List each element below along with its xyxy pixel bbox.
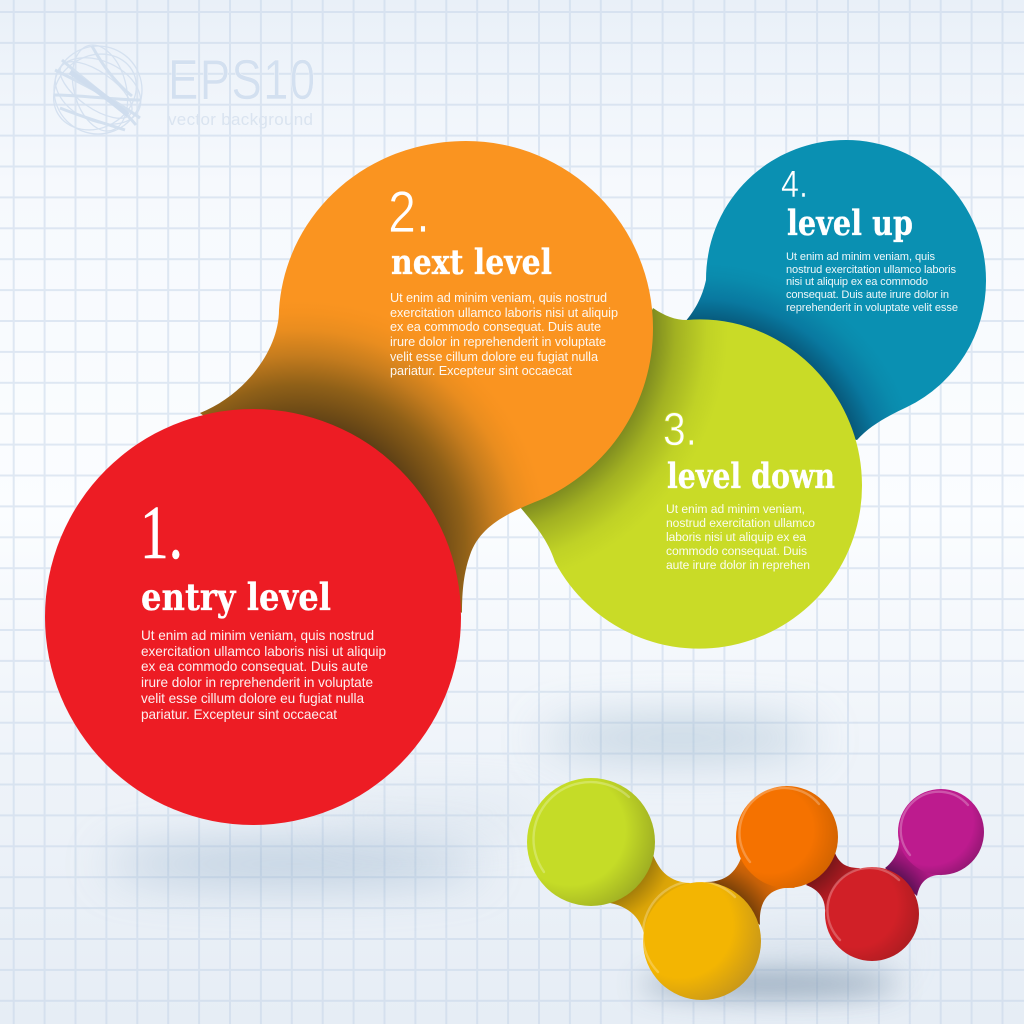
body text: Ut enim ad minim veniam, quis	[786, 251, 935, 263]
heading: next level: next level	[391, 242, 552, 283]
body text: Ut enim ad minim veniam,	[666, 502, 805, 516]
shadow: small molecule	[640, 939, 900, 996]
body text: nisi ut aliquip ex ea commodo	[786, 276, 928, 288]
blue bubble shape	[685, 140, 986, 440]
highlights	[533, 782, 968, 972]
icon: scribbled globe	[40, 39, 151, 145]
heading: level up: level up	[787, 203, 913, 244]
body text: Ut enim ad minim veniam, quis nostrud	[141, 628, 374, 643]
panel: step 1 entry level	[45, 409, 461, 825]
ball: red	[825, 867, 919, 961]
number 2: 2.	[388, 180, 430, 245]
number 4: 4.	[781, 164, 808, 206]
number 3: 3.	[663, 403, 697, 455]
body text: irure dolor in reprehenderit in voluptate	[141, 675, 373, 690]
panel: step 2 next level	[200, 141, 653, 613]
body text: reprehenderit in voluptate velit esse	[786, 302, 958, 314]
body text: aute irure dolor in reprehen	[666, 558, 810, 572]
ball: orange	[736, 786, 838, 888]
number 1: 1.	[140, 491, 183, 575]
body text: ex ea commodo consequat. Duis aute	[390, 320, 601, 334]
body text: velit esse cillum dolore eu fugiat nulla	[390, 350, 599, 364]
ball: yellow	[643, 882, 761, 1000]
connector: orange to yellow	[705, 858, 795, 925]
body text: consequat. Duis aute irure dolor in	[786, 289, 949, 301]
ball: magenta	[898, 789, 984, 875]
heading: entry level: entry level	[141, 575, 331, 619]
shadow: green circle	[540, 723, 820, 753]
small glossy molecule	[527, 778, 984, 1000]
logo text: EPS10: EPS10	[168, 47, 316, 111]
body text: laboris nisi ut aliquip ex ea	[666, 530, 806, 544]
heading: level down: level down	[667, 456, 835, 497]
logo text: vector background: vector background	[168, 110, 313, 129]
connector: magenta to red	[885, 842, 940, 896]
body text	[141, 628, 386, 722]
body text	[666, 502, 815, 572]
body text	[390, 291, 618, 378]
panel: step 3 level down	[520, 308, 862, 649]
red circle	[45, 409, 461, 825]
panel: step 4 level up	[685, 140, 986, 440]
body text: exercitation ullamco laboris nisi ut aliquip	[141, 644, 386, 659]
connector: yellow to lime	[610, 855, 690, 945]
body text: exercitation ullamco laboris nisi ut aliquip	[390, 306, 618, 320]
body text: Ut enim ad minim veniam, quis nostrud	[390, 291, 607, 305]
body text: commodo consequat. Duis	[666, 544, 807, 558]
body text: pariatur. Excepteur sint occaecat	[141, 707, 337, 722]
orange bubble shape	[200, 141, 653, 613]
green bubble shape	[520, 308, 862, 649]
shadow: large red circle	[105, 801, 550, 882]
body text: irure dolor in reprehenderit in voluptate	[390, 335, 606, 349]
body text: nostrud exercitation ullamco	[666, 516, 815, 530]
body text: pariatur. Excepteur sint occaecat	[390, 364, 572, 378]
body text: ex ea commodo consequat. Duis aute	[141, 659, 368, 674]
ball: lime	[527, 778, 655, 906]
logo: EPS10 vector background	[40, 39, 316, 145]
body text	[786, 251, 958, 314]
connector: red to orange	[806, 853, 860, 910]
body text: nostrud exercitation ullamco laboris	[786, 264, 956, 276]
body text: velit esse cillum dolore eu fugiat nulla	[141, 691, 364, 706]
